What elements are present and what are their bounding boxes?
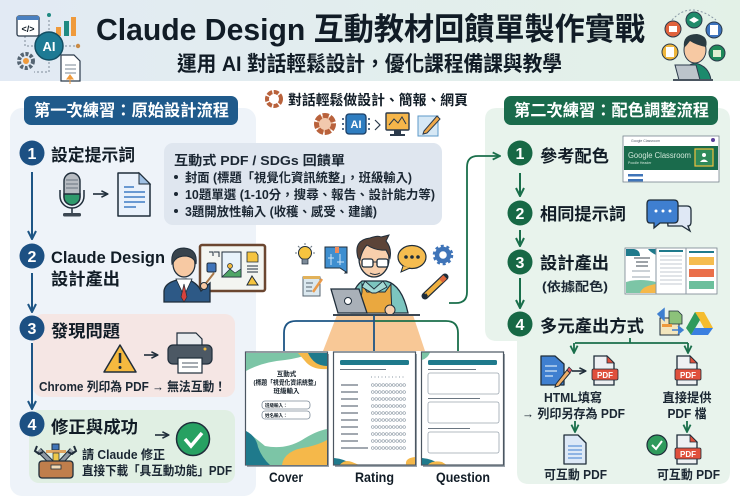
info card: prompt content: 3題開放性輸入 (收穫、感受、建議) (185, 204, 377, 219)
icon: speech bubble (398, 246, 426, 272)
right step 4 (508, 312, 644, 336)
first practice heading: 第一次練習：原始設計流程 (34, 100, 229, 120)
icon: notes with pencil (303, 276, 322, 296)
right step 3: 3 (516, 255, 525, 272)
right step 1: 參考配色 (540, 146, 609, 166)
title: Claude Design 互動教材回饋單製作實戰 (96, 12, 645, 47)
panel: step 4 fix and success: 修正與成功 (51, 417, 138, 437)
right step 2 (508, 200, 626, 226)
right step 2: 2 (516, 206, 525, 223)
info card: prompt content: 封面 (標題「視覺化資訊統整」，班級輸入) (185, 170, 412, 185)
label: rating: Rating (355, 469, 394, 485)
spotlight trapezoid (323, 315, 425, 351)
icon: AI network header left: AI (42, 39, 56, 54)
right step 3 (508, 250, 609, 294)
info card: prompt content: 互動式 PDF / SDGs 回饋單 (174, 153, 345, 168)
panel: second practice background (485, 108, 730, 484)
right step 4: 4 (516, 317, 525, 334)
image: google classroom mock: Poodle Header (628, 161, 652, 165)
icon: teacher with course bubbles (662, 10, 725, 81)
icon: light bulb (295, 243, 315, 264)
worksheet: cover: 互動式 (277, 369, 297, 378)
step 2: 設計產出 (51, 269, 120, 289)
panel: first practice background (10, 108, 256, 496)
panel: step 3 problem found: 3 (28, 321, 37, 338)
image: google classroom mock: Google Classroom (628, 151, 691, 160)
icon: warning triangle (104, 345, 136, 372)
icon: blue doc to pdf: PDF (597, 371, 613, 380)
icon: drive (686, 312, 713, 335)
step 1 (20, 140, 135, 166)
illustration: teacher at laptop (331, 235, 420, 316)
image: recoloured worksheets (625, 248, 717, 294)
text: direct route (662, 390, 712, 421)
panel: step 4 fix and success: 直接下載「具互動功能」PDF (82, 463, 232, 478)
arrow: step 3 to 4 (31, 343, 33, 408)
icon: direct pdf (675, 356, 701, 385)
icon: microphone to document (60, 173, 150, 216)
step 1: 1 (28, 146, 37, 163)
panel: step 4 fix and success: 4 (28, 417, 37, 434)
icon row: AI tools (316, 113, 440, 136)
arrow: step 2 to 3 (31, 273, 33, 311)
step 2 (20, 244, 165, 289)
icon: printer (168, 333, 212, 373)
info card: prompt content (164, 143, 442, 225)
arrow: right step 3 to 4 (519, 278, 521, 307)
icon: toolbox (35, 444, 76, 478)
panel: step 4 fix and success (20, 410, 235, 483)
text: html route: → 列印另存為 PDF (522, 406, 625, 421)
connectors: teacher to worksheets (284, 315, 458, 351)
header band (0, 0, 740, 81)
worksheet: question (422, 352, 505, 467)
right step 2: 相同提示詞 (540, 204, 626, 224)
arrow: teacher to second practice (449, 156, 499, 303)
icon: chat bubbles (647, 200, 691, 231)
worksheet: cover: 班級輸入 (274, 386, 300, 395)
worksheet: cover: 姓名輸入： (265, 412, 288, 419)
text: direct route: PDF 檔 (668, 406, 706, 421)
arrow: right step 1 to 2 (519, 173, 521, 195)
icon: blue doc to pdf (541, 356, 618, 387)
worksheet: rating (334, 352, 417, 467)
worksheet: cover: (標題「視覺化資訊統整」 (254, 378, 320, 386)
label: question: Question (436, 469, 490, 485)
arrows: to interactive outputs (575, 421, 687, 431)
text: interactive pdf left: 可互動 PDF (544, 467, 607, 482)
step 2: 2 (28, 249, 37, 266)
text: chrome print result: Chrome 列印為 PDF → 無法互動！ (39, 379, 226, 394)
connector: output split (574, 338, 688, 352)
icon: check circle (176, 422, 210, 456)
icon: blueprint speech bubble (325, 247, 347, 273)
second practice heading (504, 96, 718, 125)
icon: presenter with board (164, 245, 265, 302)
panel: step 3 problem found: 發現問題 (51, 322, 120, 341)
icon row: AI tools: AI (350, 119, 362, 131)
text: direct route: 直接提供 (662, 390, 712, 405)
image: google classroom mock (623, 136, 719, 182)
worksheet: cover: 班級輸入： (265, 402, 288, 409)
image: google classroom mock: Google Classroom (631, 139, 660, 143)
step 1: 設定提示詞 (51, 145, 135, 165)
worksheet: cover (246, 352, 329, 467)
arrow: warning to printer (144, 354, 157, 356)
center tagline: 對話輕鬆做設計、簡報、網頁 (288, 92, 468, 108)
arrow: step 1 to 2 (31, 172, 33, 238)
icon: direct pdf: PDF (680, 371, 696, 380)
text: html route: HTML填寫 (544, 390, 602, 405)
icon: check with pdf (647, 435, 701, 464)
second practice heading: 第二次練習：配色調整流程 (514, 100, 709, 120)
subtitle: 運用 AI 對話輕鬆設計，優化課程備課與教學 (177, 53, 562, 76)
label: cover: Cover (269, 469, 303, 485)
right step 3: (依據配色) (542, 279, 608, 294)
icon: check with pdf: PDF (680, 450, 696, 459)
text: interactive pdf right: 可互動 PDF (657, 467, 720, 482)
right step 1: 1 (516, 146, 525, 163)
first practice heading (24, 96, 238, 125)
text: html route (522, 390, 625, 421)
info card: prompt content: 10題單選 (1-10分，搜尋、報告、設計能力等) (185, 187, 435, 202)
icon: file transfer (658, 309, 683, 335)
right step 4: 多元產出方式 (540, 316, 644, 336)
right step 3: 設計產出 (540, 253, 609, 273)
icon: AI network header left: </> (21, 24, 35, 34)
icon: gear (434, 246, 452, 264)
arrow: to check (155, 434, 168, 436)
icon: interactive document (564, 435, 586, 464)
right step 1 (508, 140, 609, 166)
text: fix description: 請 Claude 修正 (82, 447, 165, 462)
arrow: right step 2 to 3 (519, 230, 521, 245)
icon: AI network header left (17, 13, 80, 84)
icon: pencil (424, 277, 445, 297)
panel: step 3 problem found (20, 314, 235, 397)
step 2: Claude Design (51, 248, 165, 267)
